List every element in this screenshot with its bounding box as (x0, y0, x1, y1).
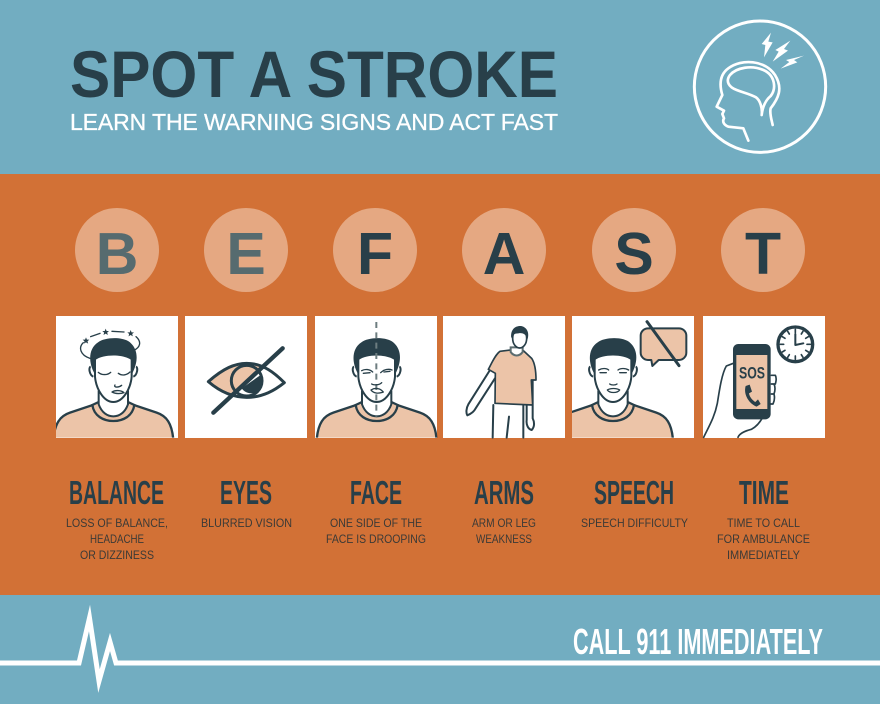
letter badge E (204, 208, 288, 292)
column: face text: FACE IS DROOPING (326, 532, 426, 546)
column: arms text: ARM OR LEG (472, 516, 536, 530)
letter badge B: B (96, 221, 138, 287)
icon: head with brain and lightning (694, 21, 826, 152)
column: arms text (472, 474, 536, 546)
icon tile: time: SOS (739, 363, 765, 382)
column: eyes text: BLURRED VISION (201, 516, 292, 530)
letter badge S: S (614, 221, 654, 287)
letter badge F: F (357, 221, 393, 287)
footer band (0, 595, 880, 704)
icon tile: balance (53, 316, 178, 440)
panel: BE FAST orange band (0, 174, 880, 595)
column: balance text: HEADACHE (90, 532, 144, 546)
header band (0, 0, 880, 174)
column: balance text: OR DIZZINESS (80, 548, 154, 562)
column: face text: ONE SIDE OF THE (330, 516, 422, 530)
letter badge T (721, 208, 805, 292)
letter badge B (75, 208, 159, 292)
ECG heartbeat line (0, 618, 880, 681)
letter badge E: E (226, 221, 266, 287)
letter badge F (333, 208, 417, 292)
column: time text: FOR AMBULANCE (717, 532, 810, 546)
column: speech text: SPEECH (594, 474, 674, 511)
icon tile: arms (443, 316, 565, 438)
letter badge A (462, 208, 546, 292)
column: speech text (581, 474, 688, 530)
column: time text: TIME TO CALL (727, 516, 800, 530)
letter badge S (592, 208, 676, 292)
column: arms text: WEAKNESS (476, 532, 532, 546)
title: SPOT A STROKE (70, 37, 558, 111)
column: balance text (66, 474, 168, 562)
icon tile: time (703, 316, 825, 438)
column: arms text: ARMS (474, 474, 534, 511)
column: speech text: SPEECH DIFFICULTY (581, 516, 688, 530)
column: face text (326, 474, 426, 546)
letter badge T: T (745, 221, 781, 287)
icon tile: face (315, 316, 437, 440)
column: face text: FACE (350, 474, 402, 511)
column: time text: TIME (739, 474, 789, 511)
column: eyes text: EYES (220, 474, 272, 511)
column: eyes text (201, 474, 292, 530)
column: balance text: BALANCE (69, 474, 164, 511)
letter badge A: A (483, 221, 525, 287)
subtitle: LEARN THE WARNING SIGNS AND ACT FAST (70, 109, 558, 135)
column: balance text: LOSS OF BALANCE, (66, 516, 168, 530)
column: time text: IMMEDIATELY (727, 548, 800, 562)
column: time text (717, 474, 810, 562)
icon tile: eye (185, 316, 307, 438)
icon tile: speech (572, 316, 694, 438)
